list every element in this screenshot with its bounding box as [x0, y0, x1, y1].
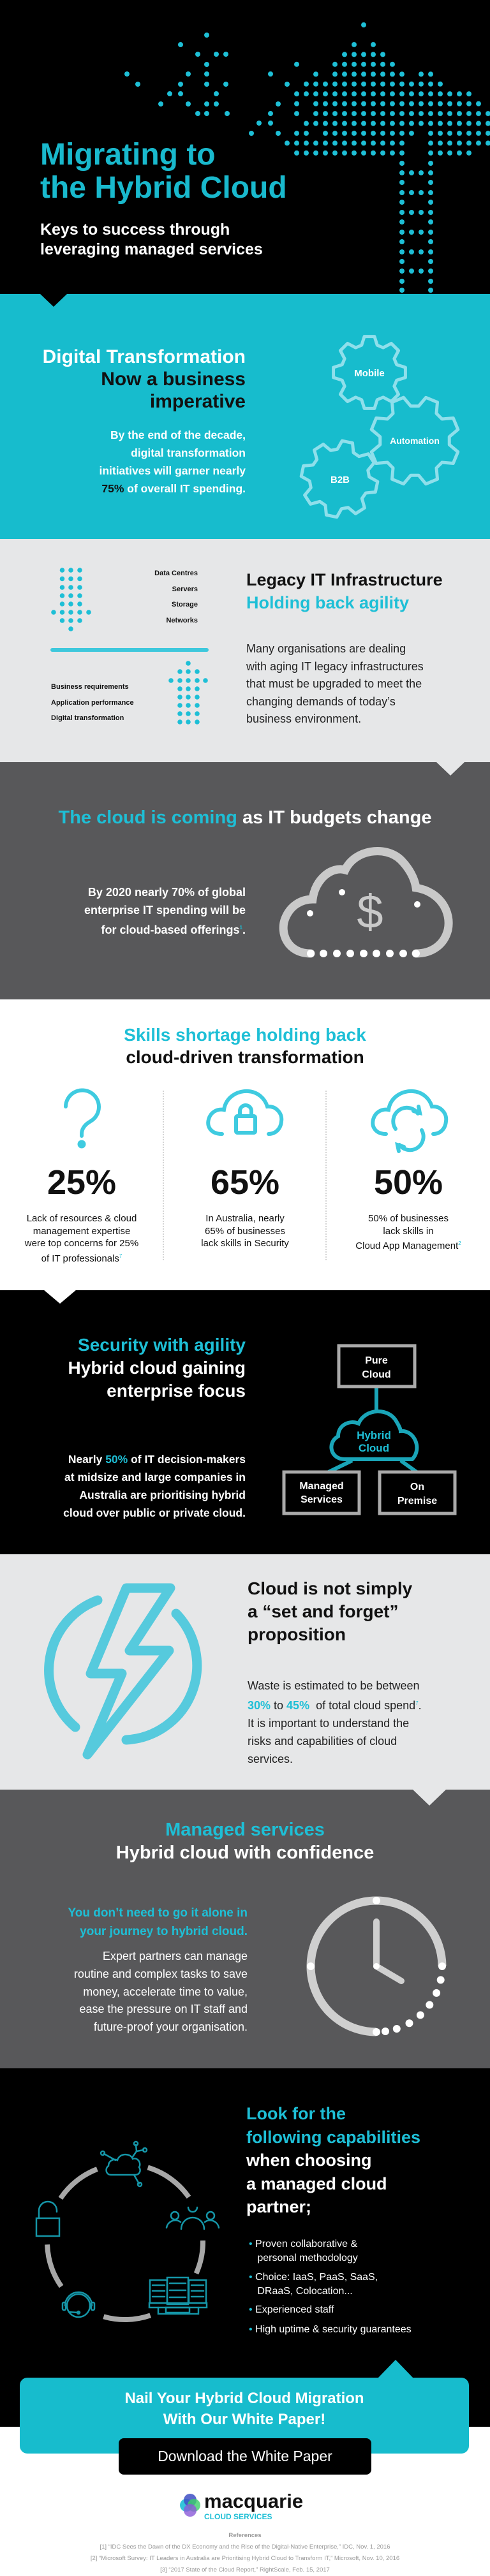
text: expert partners: Expert partners can manage: [103, 1950, 248, 1962]
stat: 65%: lack skills in Security: [201, 1238, 289, 1249]
icon: dotted cloud and hand illustration: [124, 20, 490, 293]
heading: digital transformation: [43, 346, 246, 412]
cloud: Hybrid Cloud: [331, 1411, 417, 1459]
text: hybrid priority stat: Australia are prioritising hybrid: [79, 1489, 246, 1501]
heading: legacy IT: [246, 570, 443, 612]
stat: 50%: [355, 1163, 461, 1251]
labels: business needs: [51, 683, 134, 722]
icon: servers: [149, 2278, 207, 2314]
stat: 25%: of IT professionals7: [41, 1253, 122, 1264]
text: digital transformation stat: initiatives will garner nearly: [99, 464, 246, 477]
labels: legacy infrastructure: Data Centres: [154, 570, 198, 577]
icon: cloud network: [101, 2142, 147, 2186]
text: digital transformation stat: [99, 429, 246, 495]
text: legacy paragraph: Many organisations are dealing: [246, 642, 406, 655]
text: legacy paragraph: [246, 642, 424, 725]
text: expert partners: ease the pressure on IT staff and: [79, 2003, 248, 2015]
heading: skills shortage: cloud-driven transformation: [126, 1047, 364, 1067]
list: capabilities: DRaaS, Colocation...: [257, 2286, 353, 2297]
heading: managed services: Hybrid cloud with confidence: [116, 1843, 374, 1863]
text: expert partners: money, accelerate time to value,: [83, 1985, 248, 1998]
stat: 25%: were top concerns for 25%: [25, 1238, 138, 1249]
callout: white paper CTA: With Our White Paper!: [163, 2411, 325, 2428]
references: [1] “IDC Sees the Dawn of the DX Economy and the Rise of the Digital-Native Enterprise,” IDC, Nov. 1, 2016: [100, 2543, 390, 2550]
text: digital transformation stat: 75% of overall IT spending.: [101, 482, 246, 495]
text: not alone: your journey to hybrid cloud.: [80, 1925, 248, 1938]
text: expert partners: future-proof your organisation.: [94, 2020, 248, 2033]
text: hybrid priority stat: [63, 1453, 246, 1519]
labels: legacy infrastructure: [154, 570, 198, 624]
heading: cloud is coming: The cloud is coming as IT budgets change: [59, 807, 431, 828]
box: Pure Cloud: Cloud: [362, 1369, 391, 1380]
heading: managed services: Managed services: [165, 1820, 325, 1840]
heading: digital transformation: Now a business: [101, 369, 246, 390]
icons: capabilities: [36, 2142, 219, 2317]
heading: legacy IT: Legacy IT Infrastructure: [246, 570, 443, 589]
references: [91, 2532, 399, 2573]
icon: headset: [63, 2292, 94, 2317]
diagram: hybrid cloud: [284, 1346, 455, 1513]
button: download: [119, 2438, 371, 2475]
list: capabilities: • Choice: IaaS, PaaS, SaaS,: [249, 2272, 378, 2283]
box: Pure Cloud: [339, 1346, 415, 1387]
callout: white paper CTA: [20, 2360, 469, 2454]
labels: legacy infrastructure: Networks: [166, 616, 198, 624]
text: hybrid priority stat: cloud over public or private cloud.: [63, 1506, 246, 1519]
icon: up arrow dots: [168, 661, 208, 725]
text: expert partners: [74, 1950, 248, 2033]
icon: down arrow dots: [51, 568, 91, 631]
logo: macquarie cloud services: macquarie: [204, 2490, 303, 2512]
text: cloud spending stat: [84, 886, 246, 936]
heading: security with agility: Security with agility: [78, 1335, 246, 1355]
heading: look for capabilities: partner;: [246, 2197, 311, 2216]
text: legacy paragraph: changing demands of today’s: [246, 695, 396, 708]
icon: gears: B2B: [330, 475, 350, 485]
text: legacy paragraph: with aging IT legacy infrastructures: [246, 660, 424, 673]
heading: set and forget: Cloud is not simply: [248, 1579, 412, 1598]
text: waste stat: It is important to understand the: [248, 1717, 409, 1730]
labels: legacy infrastructure: Storage: [172, 601, 198, 608]
stat: 25%: [24, 1163, 138, 1264]
text: not alone: You don’t need to go it alone in: [68, 1906, 248, 1920]
heading: look for capabilities: Look for the: [246, 2104, 346, 2123]
box: On Premise: Premise: [397, 1496, 437, 1506]
box: On Premise: On: [410, 1482, 424, 1492]
icon: clock: [307, 1897, 446, 2036]
subtitle: leveraging managed services: [40, 240, 263, 258]
button: download: Download the White Paper: [158, 2448, 332, 2464]
title: the Hybrid Cloud: [40, 171, 287, 205]
heading: security with agility: Hybrid cloud gaining: [68, 1358, 246, 1378]
title: [40, 138, 287, 205]
callout: white paper CTA: Nail Your Hybrid Cloud Migration: [124, 2390, 364, 2407]
cloud: Hybrid Cloud: Cloud: [359, 1442, 389, 1454]
logo: macquarie cloud services: CLOUD SERVICES: [204, 2512, 272, 2521]
box: Managed Services: Services: [301, 1494, 343, 1505]
text: digital transformation stat: By the end of the decade,: [110, 429, 246, 441]
icon: gears: [295, 337, 473, 524]
text: cloud spending stat: By 2020 nearly 70% of global: [88, 886, 246, 899]
heading: look for capabilities: following capabilities: [246, 2128, 420, 2147]
stat: 50%: 50% of businesses: [368, 1213, 449, 1224]
labels: legacy infrastructure: Servers: [172, 585, 198, 593]
cloud: Hybrid Cloud: Hybrid: [357, 1429, 391, 1441]
heading: set and forget: a “set and forget”: [248, 1601, 398, 1621]
icon: cloud refresh: [373, 1091, 446, 1151]
text: waste stat: Waste is estimated to be between: [248, 1679, 419, 1692]
list: capabilities: • High uptime & security guarantees: [249, 2324, 412, 2335]
icon: gears: Mobile: [354, 368, 385, 379]
heading: managed services: [116, 1820, 374, 1863]
stat: 50%: 50%: [374, 1163, 443, 1202]
stat: 65%: [201, 1163, 289, 1249]
heading: security with agility: enterprise focus: [107, 1381, 246, 1401]
icon: lock: [36, 2202, 59, 2236]
text: waste stat: risks and capabilities of cloud: [248, 1735, 397, 1748]
references: [2] “Microsoft Survey: IT Leaders in Australia are Prioritising Hybrid Cloud to Transform IT,” Microsoft, Nov. 10, 2016: [91, 2555, 399, 2562]
title: Migrating to: [40, 138, 216, 172]
list: capabilities: • Proven collaborative &: [249, 2239, 357, 2249]
stat: 25%: Lack of resources & cloud: [27, 1213, 137, 1224]
gear: Mobile: [334, 337, 405, 408]
heading: look for capabilities: a managed cloud: [246, 2174, 387, 2193]
text: hybrid priority stat: Nearly 50% of IT decision-makers: [68, 1453, 246, 1466]
labels: business needs: Application performance: [51, 699, 134, 707]
heading: security with agility: [68, 1335, 246, 1401]
divider line teal: [52, 648, 207, 652]
list: capabilities: • Experienced staff: [249, 2304, 334, 2315]
notches: [40, 293, 465, 1806]
text: legacy paragraph: business environment.: [246, 712, 361, 725]
list: capabilities: personal methodology: [257, 2253, 358, 2263]
subtitle: Keys to success through: [40, 221, 230, 239]
heading: set and forget: [248, 1579, 412, 1644]
gear: B2B: [295, 434, 384, 524]
subtitle: [40, 221, 263, 258]
text: not alone: [68, 1906, 248, 1938]
column dividers: [163, 1091, 326, 1262]
box: On Premise: [380, 1472, 455, 1513]
box: Managed Services: [284, 1472, 359, 1513]
heading: digital transformation: imperative: [150, 391, 246, 412]
heading: digital transformation: Digital Transformation: [43, 346, 246, 367]
labels: business needs: Business requirements: [51, 683, 129, 691]
text: expert partners: routine and complex tasks to save: [74, 1968, 248, 1980]
icon: gears: Automation: [390, 436, 440, 446]
heading: set and forget: proposition: [248, 1624, 346, 1644]
text: cloud spending stat: for cloud-based offerings1.: [101, 924, 246, 936]
heading: skills shortage: [124, 1025, 366, 1067]
heading: look for capabilities: [246, 2104, 420, 2216]
heading: look for capabilities: when choosing: [246, 2151, 372, 2170]
icon: people: [167, 2207, 219, 2229]
icon: cloud with dollar: [283, 851, 449, 957]
text: digital transformation stat: digital transformation: [131, 446, 246, 459]
icon: cloud lock: [208, 1091, 281, 1134]
icon: question mark: [66, 1090, 99, 1147]
labels: business needs: Digital transformation: [51, 714, 124, 722]
heading: legacy IT: Holding back agility: [246, 593, 409, 612]
heading: skills shortage: Skills shortage holding back: [124, 1025, 366, 1045]
text: legacy paragraph: that must be upgraded to meet the: [246, 677, 422, 690]
references: [3] “2017 State of the Cloud Report,” RightScale, Feb. 15, 2017: [160, 2566, 330, 2573]
references: References: [228, 2532, 262, 2539]
gear: Automation: [357, 383, 473, 499]
diagram: capability circle: [47, 2167, 203, 2320]
icon: lightning power: [49, 1588, 197, 1755]
text: waste stat: services.: [248, 1753, 293, 1765]
box: Pure Cloud: Pure: [365, 1355, 388, 1366]
stat: 65%: 65%: [211, 1163, 279, 1202]
text: waste stat: 30% to 45% of total cloud spend7.: [248, 1699, 422, 1712]
stat: 25%: management expertise: [33, 1226, 130, 1236]
box: Managed Services: Managed: [299, 1481, 344, 1492]
stat: 25%: 25%: [47, 1163, 116, 1202]
text: hybrid priority stat: at midsize and large companies in: [64, 1471, 246, 1483]
text: cloud spending stat: enterprise IT spending will be: [84, 904, 246, 916]
stat: 65%: In Australia, nearly: [205, 1213, 285, 1224]
stat: 65%: 65% of businesses: [205, 1226, 285, 1236]
list: capabilities: [249, 2239, 412, 2335]
icon: cloud with dollar: $: [357, 885, 383, 938]
logo: macquarie cloud services: [180, 2490, 303, 2521]
stat: 50%: lack skills in: [383, 1226, 434, 1236]
stat: 50%: Cloud App Management2: [355, 1240, 461, 1251]
text: waste stat: [248, 1679, 422, 1765]
